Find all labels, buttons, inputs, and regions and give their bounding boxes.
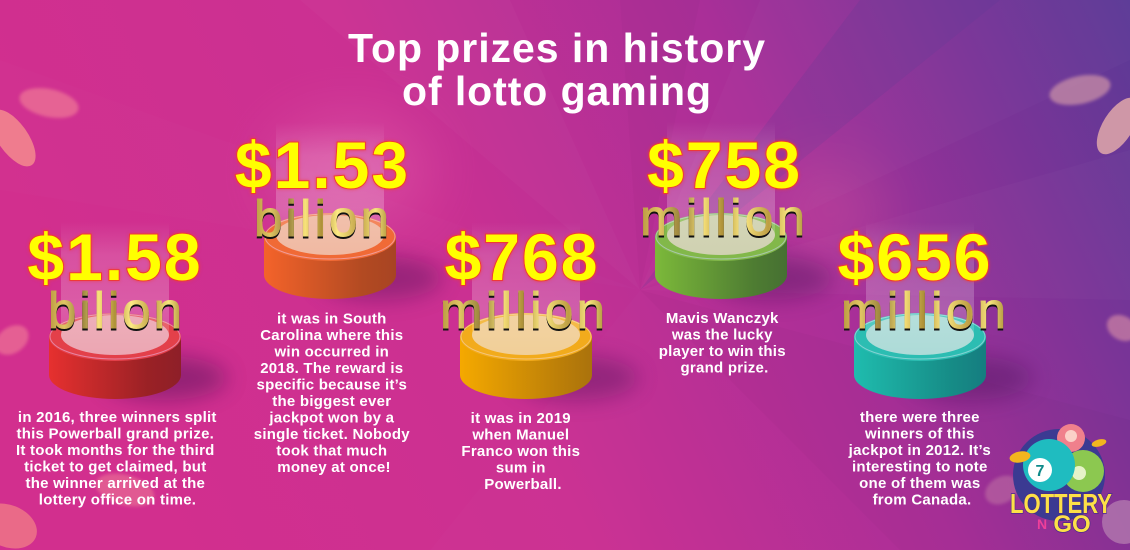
icon: right gold coin — [1091, 438, 1107, 448]
description: jackpot in 2012. It’s — [848, 442, 991, 459]
description: lottery office on time. — [39, 492, 196, 508]
logo: Lottery N Go — [1009, 424, 1112, 538]
description: 2018. The reward is — [260, 360, 403, 377]
panel: prize 1.58 billion — [16, 220, 227, 508]
icon: white ball label — [1028, 458, 1052, 482]
unit: million — [841, 282, 1006, 339]
description: the biggest ever — [272, 393, 391, 410]
description: grand prize. — [680, 360, 769, 376]
panel: prize 768 million — [440, 220, 638, 493]
podium: teal — [854, 222, 1032, 400]
description: money at once! — [277, 459, 391, 476]
logo badge circle — [1013, 429, 1105, 521]
panel: prize 1.53 billion — [235, 122, 442, 476]
description: It took months for the third — [16, 442, 215, 459]
description: it was in 2019 — [471, 410, 571, 427]
podium: amber — [460, 222, 638, 400]
amount: $1.58 — [27, 220, 203, 294]
description: interesting to note — [852, 458, 988, 476]
podium: red — [49, 222, 227, 400]
amount: $758 — [647, 128, 802, 202]
description: Franco won this — [461, 443, 580, 460]
unit: bilion — [48, 282, 182, 339]
panel: prize 656 million — [838, 220, 1032, 508]
description: single ticket. Nobody — [254, 426, 410, 443]
icon: green ball — [1062, 450, 1104, 492]
description: the winner arrived at the — [25, 475, 205, 492]
description: player to win this — [659, 343, 786, 360]
unit: million — [640, 189, 805, 246]
description: sum in — [496, 460, 546, 476]
amount: $768 — [445, 220, 599, 294]
description: there were three — [860, 409, 980, 426]
description: ticket to get claimed, but — [24, 458, 206, 476]
icon: pink ball highlight — [1065, 430, 1077, 442]
icon: left gold coin — [1009, 450, 1031, 464]
description: this Powerball grand prize. — [16, 426, 214, 442]
description: jackpot won by a — [268, 410, 395, 426]
description: in 2016, three winners split — [18, 409, 217, 426]
description: win occurred in — [273, 344, 389, 360]
description: specific because it’s — [256, 376, 407, 394]
amount: $656 — [838, 220, 992, 294]
title: of lotto gaming — [402, 68, 711, 114]
description: Mavis Wanczyk — [666, 310, 779, 327]
logo word: n: N — [1037, 516, 1047, 532]
title: Top prizes in history — [348, 25, 765, 71]
description: was the lucky — [671, 326, 773, 344]
description: one of them was — [859, 475, 980, 492]
icon: pink ball — [1057, 424, 1085, 452]
icon: teal ball — [1023, 439, 1075, 491]
description: when Manuel — [471, 426, 569, 444]
amount: $1.53 — [235, 128, 410, 202]
description: took that much — [276, 442, 387, 460]
panel: prize 758 million — [640, 122, 833, 376]
icon: green ball label — [1072, 466, 1086, 480]
description: Powerball. — [484, 476, 562, 493]
podium: orange — [264, 122, 442, 300]
logo word: go: GO — [1053, 511, 1091, 538]
podium: green — [655, 122, 833, 300]
title — [348, 25, 765, 114]
icon: ball number: 7 — [1036, 463, 1045, 480]
description: from Canada. — [873, 492, 971, 508]
description: winners of this — [864, 426, 975, 442]
unit: million — [440, 282, 605, 339]
unit: bilion — [254, 190, 389, 247]
description: Carolina where this — [260, 327, 403, 344]
description: it was in South — [277, 310, 387, 328]
